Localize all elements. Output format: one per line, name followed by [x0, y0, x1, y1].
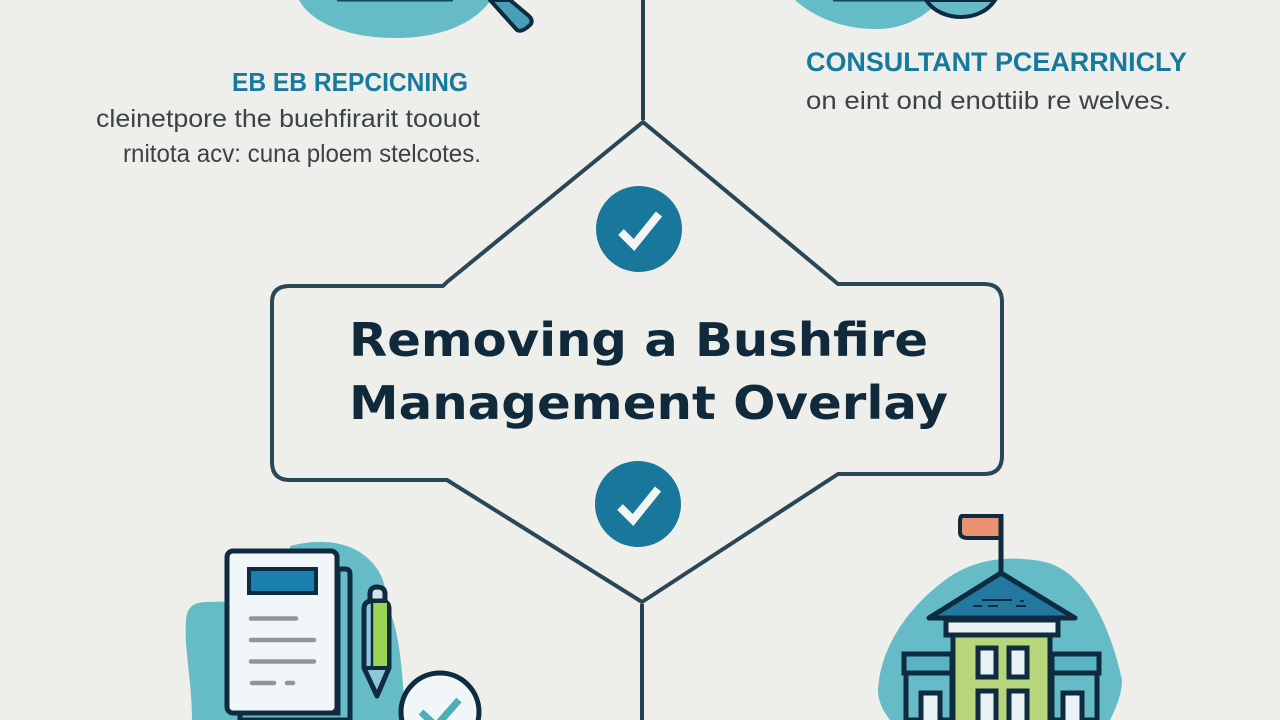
- page text lines: [251, 618, 314, 683]
- bottom vertical connector: [640, 604, 644, 720]
- icon: top check badge: [596, 186, 682, 272]
- top vertical connector: [641, 0, 645, 120]
- building blob: [878, 559, 1122, 720]
- pen: [364, 587, 389, 696]
- page header bar: [249, 569, 316, 593]
- title: [349, 313, 948, 430]
- right wing: [1052, 673, 1097, 720]
- flag: [960, 516, 1001, 538]
- heading: left step: EB EB REPCICNING: [232, 67, 468, 97]
- main tower: [953, 635, 1050, 720]
- cornice band: [946, 620, 1058, 635]
- tower windows: [978, 648, 1027, 720]
- title panel outline: [272, 122, 1002, 602]
- icon: top left magnifier on blob: [299, 0, 532, 38]
- title: Management Overlay: [349, 376, 948, 430]
- title: Removing a Bushfire: [349, 313, 928, 367]
- flag pole: [998, 514, 1004, 574]
- text block: left step description: [96, 105, 481, 168]
- roof: [929, 573, 1075, 618]
- blob behind document: [186, 542, 406, 720]
- icon: bottom check badge: [595, 461, 681, 547]
- text block: left step description: rnitota acv: cuna ploem stelcotes.: [123, 140, 481, 168]
- icon: document, pen and check: [186, 542, 479, 720]
- icon: government building with flag: [878, 514, 1122, 720]
- text block: right step description: on eint ond enottiib re welves.: [806, 87, 1171, 115]
- check circle: [401, 673, 479, 720]
- text block: left step description: cleinetpore the buehfirarit toouot: [96, 105, 480, 133]
- front page: [227, 551, 337, 713]
- left wing: [906, 673, 952, 720]
- back page: [240, 569, 350, 720]
- icon: top right magnifier on blob: [795, 0, 995, 29]
- heading: right step: CONSULTANT PCEARRNICLY: [806, 47, 1187, 77]
